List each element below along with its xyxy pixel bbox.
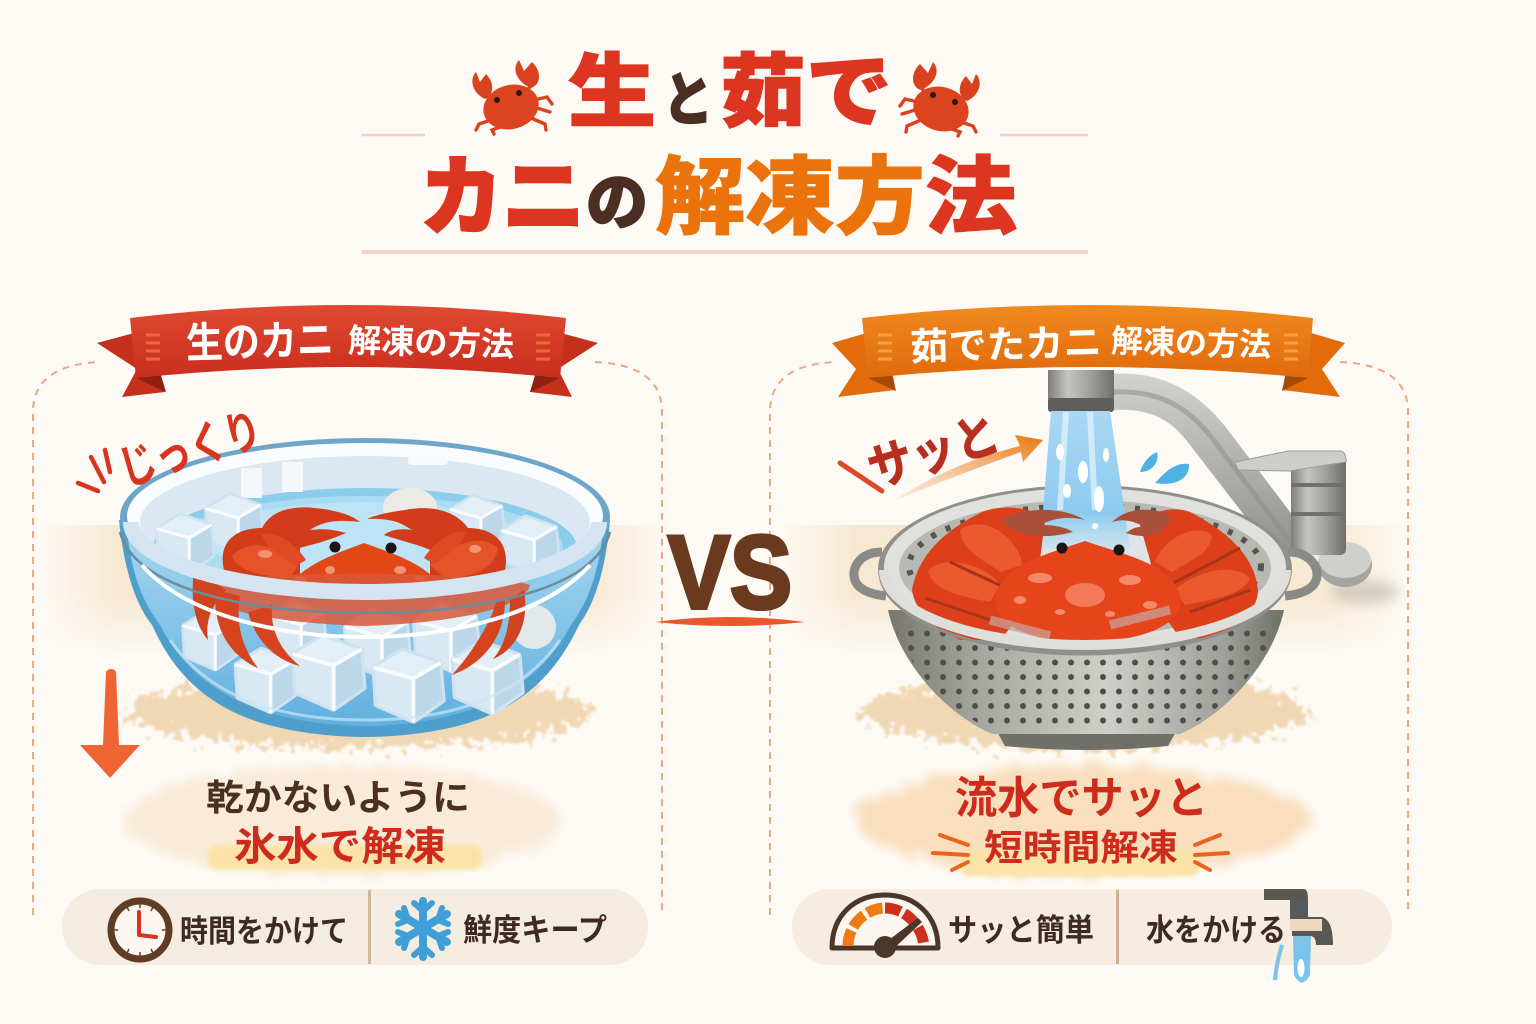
title line 1: 茹で — [720, 48, 892, 137]
ice cubes below rim — [184, 602, 556, 720]
water stream — [1040, 411, 1130, 548]
icon: clock — [111, 901, 169, 959]
title line 1: 生 — [568, 48, 656, 137]
info pill right — [792, 889, 1392, 982]
icon: speed gauge — [832, 895, 938, 958]
title decorative crab left — [472, 60, 552, 135]
faucet — [1048, 370, 1399, 604]
info pill left: 時間をかけて — [180, 914, 348, 949]
crab in bowl — [223, 507, 506, 597]
title line 1 — [568, 48, 892, 137]
じっくり handwritten label: じっくり — [113, 402, 268, 496]
table band and sand right — [780, 525, 1405, 748]
panel: boiled crab — [770, 305, 1408, 982]
info pill right: 水をかける — [1146, 913, 1286, 948]
dashed panel outline right — [770, 362, 1408, 915]
dashed panel outline left — [33, 362, 662, 915]
サッと handwritten label with arrow: サッと — [861, 406, 1006, 498]
panel: raw crab — [33, 305, 665, 965]
caption blob right: 短時間解凍 — [984, 827, 1178, 868]
info pill right: サッと簡単 — [948, 913, 1094, 948]
arrow: downward — [80, 669, 140, 778]
title line 2: 解凍方 — [655, 151, 925, 246]
info pill left — [62, 889, 648, 965]
title line 2 — [420, 150, 1017, 246]
title line 2: カニ — [420, 150, 585, 246]
caption blob left: 乾かないように — [206, 777, 470, 818]
water splash drops — [1140, 452, 1189, 484]
info pill left: 鮮度キープ — [463, 913, 607, 948]
ribbon: boiled crab heading — [832, 305, 1345, 397]
caption blob right: 流水でサッと — [955, 774, 1208, 823]
じっくり handwritten label — [78, 402, 268, 496]
title line 2: 法 — [925, 151, 1017, 246]
title decorative crab right — [900, 62, 980, 137]
table band and sand left — [40, 525, 665, 748]
ribbon: boiled crab heading: 茹でたカニ — [910, 322, 1103, 369]
colander handles — [854, 552, 1317, 596]
caption blob left — [122, 765, 562, 875]
ribbon: raw crab heading: 生のカニ — [185, 316, 334, 367]
title line 2: の — [586, 169, 648, 238]
glass bowl with ice water — [119, 438, 610, 737]
title line 1: と — [663, 68, 713, 133]
title — [362, 48, 1088, 252]
ice cubes behind crab — [158, 488, 558, 574]
colander front rim — [880, 570, 1290, 654]
ribbon: raw crab heading: 解凍の方法 — [348, 322, 515, 363]
icon: tap with water — [1264, 889, 1333, 982]
VS badge: VS — [668, 515, 792, 631]
caption blob right — [854, 765, 1310, 876]
crab in colander — [912, 507, 1258, 642]
ribbon: boiled crab heading: 解凍の方法 — [1111, 323, 1271, 363]
caption blob left: 氷水で解凍 — [234, 825, 446, 869]
colander — [878, 485, 1292, 750]
crab seen through glass — [193, 570, 530, 675]
icon: snowflake — [398, 901, 448, 957]
ribbon: raw crab heading — [97, 305, 598, 397]
